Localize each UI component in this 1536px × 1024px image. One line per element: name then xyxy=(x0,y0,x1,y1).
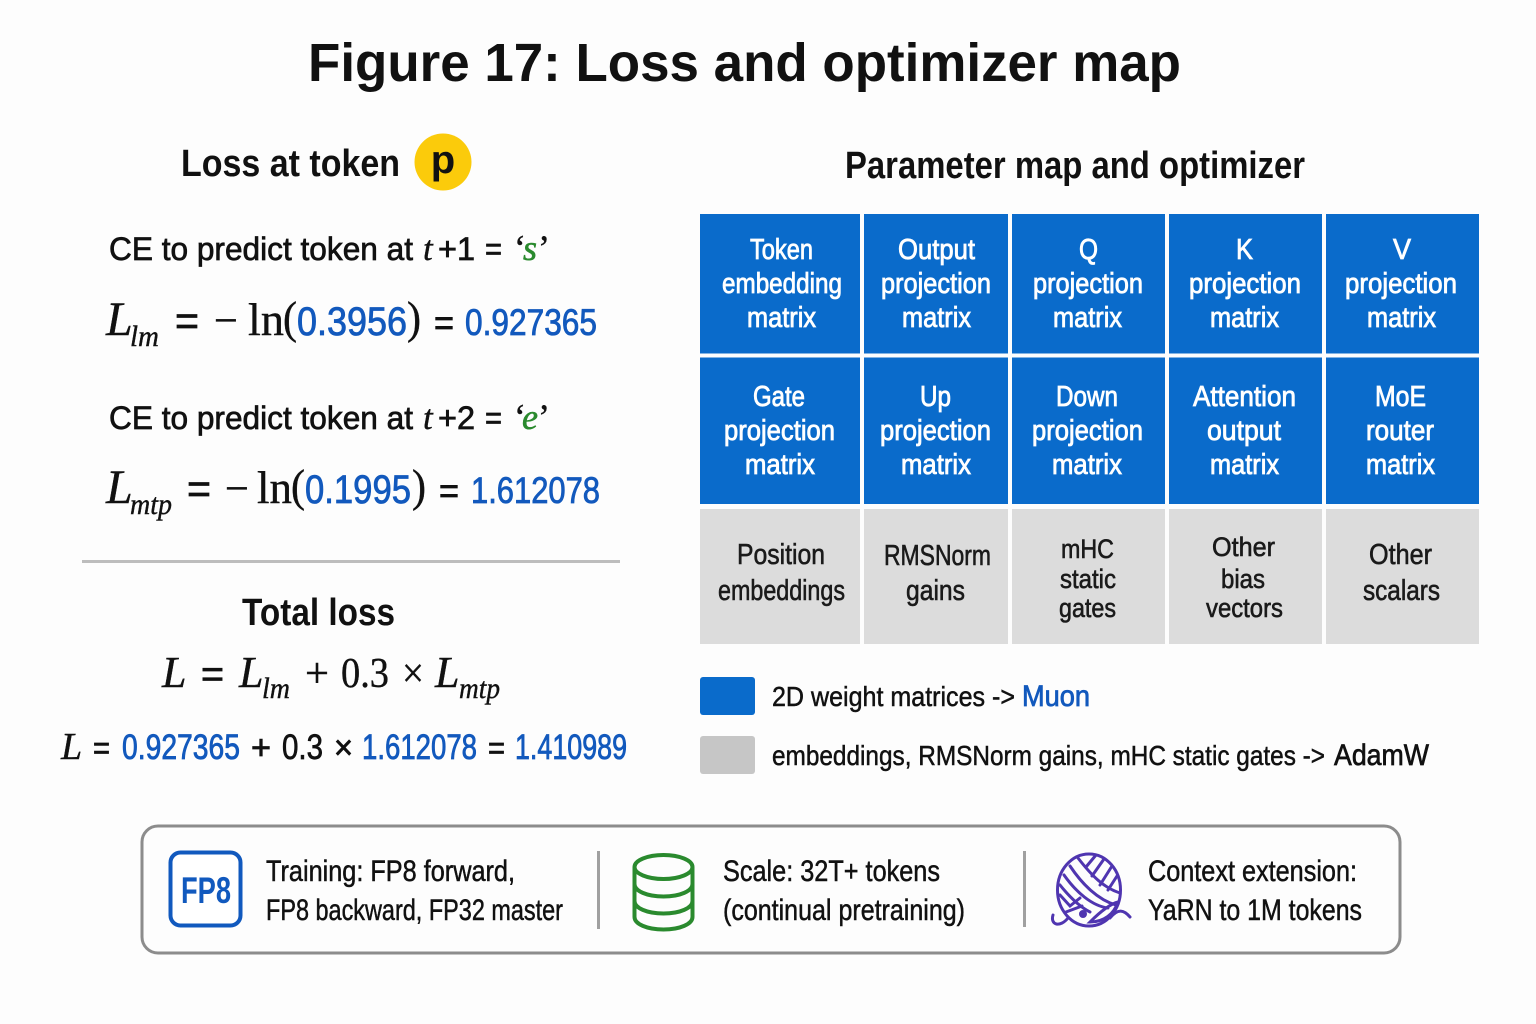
cell: up projection matrix: projection xyxy=(880,415,991,447)
cell: Q projection matrix xyxy=(1012,214,1165,354)
cell: V projection matrix: V xyxy=(1393,234,1412,266)
text: CE to predict token at t+2: e xyxy=(522,397,538,437)
formula: total loss symbolic: mtp xyxy=(459,672,500,705)
heading: loss at token p: Loss at token xyxy=(181,143,400,185)
cell: token embedding matrix: Token xyxy=(750,234,813,266)
text: CE to predict token at t+1: = xyxy=(485,231,502,267)
cell: other bias vectors: Other xyxy=(1212,532,1275,562)
heading: loss at token p xyxy=(181,134,472,190)
cell: K projection matrix: K xyxy=(1236,234,1254,266)
cell: V projection matrix: projection xyxy=(1345,268,1457,300)
formula: total loss numeric: 0.3 xyxy=(282,728,323,767)
legend: Muon xyxy=(700,677,1090,715)
formula: total loss numeric: = xyxy=(488,730,505,766)
text: CE to predict token at t+1: +1 xyxy=(438,231,475,267)
cell: Q projection matrix: Q xyxy=(1079,234,1098,266)
cell: mHC static gates: static xyxy=(1060,564,1116,594)
icon: database xyxy=(634,855,692,930)
formula: L_mtp: 0.1995 xyxy=(305,468,411,512)
formula: total loss numeric: + xyxy=(251,729,271,767)
cell: down projection matrix: projection xyxy=(1032,415,1143,447)
heading: total loss: Total loss xyxy=(242,592,395,634)
formula: L_mtp: = xyxy=(187,465,211,512)
formula: L_mtp: 1.612078 xyxy=(471,470,600,511)
cell: down projection matrix: Down xyxy=(1056,381,1118,413)
icon: FP8: FP8 xyxy=(181,870,231,911)
formula: total loss symbolic xyxy=(161,648,500,705)
formula: total loss numeric: L xyxy=(60,726,82,768)
legend: Muon: Muon xyxy=(1022,680,1090,713)
cell: output projection matrix: Output xyxy=(898,234,975,266)
text: CE to predict token at t+1: ’ xyxy=(538,228,550,268)
cell: token embedding matrix: embedding xyxy=(722,268,842,300)
title: Figure 17: Loss and optimizer map xyxy=(308,33,1181,93)
formula: L_lm xyxy=(105,292,597,353)
cell: mHC static gates xyxy=(1012,509,1165,644)
text: CE to predict token at t+2: ‘ xyxy=(514,397,526,437)
cell: MoE router matrix: matrix xyxy=(1366,449,1435,481)
cell: other bias vectors: bias xyxy=(1221,564,1265,594)
cell: other bias vectors: vectors xyxy=(1206,593,1283,623)
legend: AdamW: AdamW xyxy=(1334,739,1430,772)
panel: training summary bar xyxy=(142,826,1400,953)
text: scale: Scale: 32T+ tokens xyxy=(723,855,940,888)
formula: L_mtp: ) xyxy=(412,460,426,511)
cell: output projection matrix: projection xyxy=(881,268,991,300)
formula: L_mtp: = xyxy=(439,470,459,511)
cell: output projection matrix: matrix xyxy=(902,302,971,334)
text: CE to predict token at t+1: t xyxy=(423,229,434,268)
cell: down projection matrix: matrix xyxy=(1052,449,1122,481)
formula: L_lm: lm xyxy=(130,320,159,353)
cell: attention output matrix xyxy=(1169,358,1322,504)
heading: loss at token p: p xyxy=(431,138,455,182)
cell: Q projection matrix: projection xyxy=(1033,268,1143,300)
text: training xyxy=(266,855,563,927)
formula: L_lm: ) xyxy=(407,292,421,343)
heading: parameter map: Parameter map and optimizer xyxy=(845,145,1305,187)
cell: Q projection matrix: matrix xyxy=(1053,302,1122,334)
formula: total loss symbolic: 0.3 xyxy=(341,651,389,697)
cell: gate projection matrix: matrix xyxy=(745,449,815,481)
formula: total loss symbolic: × xyxy=(402,651,424,697)
cell: up projection matrix: matrix xyxy=(901,449,971,481)
text: CE to predict token at t+1 xyxy=(109,228,550,268)
text: training: Training: FP8 forward, xyxy=(266,855,515,888)
formula: total loss numeric: 1.612078 xyxy=(362,728,477,767)
formula: L_lm: 0.927365 xyxy=(465,302,597,343)
cell: other scalars: Other xyxy=(1369,539,1432,571)
formula: L_lm: L xyxy=(105,293,133,346)
text: CE to predict token at t+2: ’ xyxy=(538,397,550,437)
cell: up projection matrix: Up xyxy=(920,381,951,413)
formula: total loss numeric: × xyxy=(334,729,353,767)
icon: FP8 xyxy=(170,852,240,926)
formula: L_mtp: ln xyxy=(257,462,292,513)
text: CE to predict token at t+1: s xyxy=(523,228,537,268)
text: context extension: Context extension: xyxy=(1148,855,1357,888)
formula: L_lm: 0.3956 xyxy=(297,300,407,344)
text: CE to predict token at t+2: = xyxy=(485,400,502,436)
formula: L_mtp xyxy=(105,460,600,521)
cell: attention output matrix: Attention xyxy=(1193,381,1296,413)
formula: total loss symbolic: = xyxy=(201,654,224,696)
cell: position embeddings xyxy=(700,509,860,644)
formula: total loss symbolic: L xyxy=(434,648,459,697)
cell: other scalars xyxy=(1326,509,1479,644)
cell: V projection matrix: matrix xyxy=(1367,302,1436,334)
cell: position embeddings: embeddings xyxy=(718,575,845,607)
panel: parameter map and optimizer xyxy=(700,145,1479,774)
formula: L_lm: − xyxy=(214,296,238,345)
legend: AdamW: embeddings, RMSNorm gains, mHC static gates -> xyxy=(772,740,1325,771)
formula: L_lm: = xyxy=(175,297,199,344)
formula: total loss symbolic: L xyxy=(161,648,186,697)
cell: position embeddings: Position xyxy=(737,539,825,571)
cell: gate projection matrix xyxy=(700,358,860,504)
icon: yarn ball xyxy=(1052,854,1130,926)
cell: attention output matrix: output xyxy=(1207,415,1281,447)
cell: token embedding matrix: matrix xyxy=(747,302,816,334)
formula: total loss numeric: 0.927365 xyxy=(122,728,240,767)
formula: L_mtp: ( xyxy=(291,460,305,511)
cell: MoE router matrix: router xyxy=(1366,415,1434,447)
cell: K projection matrix: matrix xyxy=(1210,302,1279,334)
cell: mHC static gates: gates xyxy=(1059,593,1116,623)
formula: total loss numeric xyxy=(60,726,627,768)
cell: attention output matrix: matrix xyxy=(1210,449,1279,481)
formula: total loss symbolic: lm xyxy=(262,672,290,705)
text: context extension: YaRN to 1M tokens xyxy=(1148,894,1362,927)
formula: L_lm: = xyxy=(434,302,454,343)
text: CE to predict token at t+1: CE to predict token at xyxy=(109,231,413,267)
text: CE to predict token at t+2: +2 xyxy=(438,400,475,436)
cell: gate projection matrix: Gate xyxy=(753,381,805,413)
formula: L_mtp: L xyxy=(105,461,133,514)
cell: RMSNorm gains: gains xyxy=(906,575,965,607)
formula: L_lm: ( xyxy=(283,292,297,343)
text: scale: (continual pretraining) xyxy=(723,894,965,927)
cell: K projection matrix xyxy=(1169,214,1322,354)
formula: total loss symbolic: + xyxy=(305,651,329,697)
cell: K projection matrix: projection xyxy=(1189,268,1301,300)
text: CE to predict token at t+2 xyxy=(109,397,550,437)
legend: Muon: 2D weight matrices -> xyxy=(772,681,1015,712)
text: training: FP8 backward, FP32 master xyxy=(266,894,563,927)
cell: RMSNorm gains: RMSNorm xyxy=(884,540,991,572)
formula: L_lm: ln xyxy=(248,294,284,345)
text: context extension xyxy=(1148,855,1362,927)
text: CE to predict token at t+1: ‘ xyxy=(514,228,526,268)
cell: MoE router matrix xyxy=(1326,358,1479,504)
cell: output projection matrix xyxy=(864,214,1008,354)
formula: L_mtp: mtp xyxy=(130,488,172,521)
cell: MoE router matrix: MoE xyxy=(1375,381,1426,413)
cell: up projection matrix xyxy=(864,358,1008,504)
text: CE to predict token at t+2: CE to predict token at xyxy=(109,400,413,436)
cell: gate projection matrix: projection xyxy=(724,415,835,447)
cell: other bias vectors xyxy=(1169,509,1322,644)
text: scale xyxy=(723,855,965,927)
formula: L_mtp: − xyxy=(225,464,249,513)
cell: mHC static gates: mHC xyxy=(1061,534,1114,564)
cell: V projection matrix xyxy=(1326,214,1479,354)
formula: total loss numeric: = xyxy=(93,730,110,766)
cell: RMSNorm gains xyxy=(864,509,1008,644)
cell: token embedding matrix xyxy=(700,214,860,354)
cell: other scalars: scalars xyxy=(1363,575,1440,607)
text: CE to predict token at t+2: t xyxy=(423,398,434,437)
formula: total loss numeric: 1.410989 xyxy=(515,728,627,767)
cell: down projection matrix xyxy=(1012,358,1165,504)
panel: loss at token xyxy=(60,134,627,768)
formula: total loss symbolic: L xyxy=(238,648,263,697)
